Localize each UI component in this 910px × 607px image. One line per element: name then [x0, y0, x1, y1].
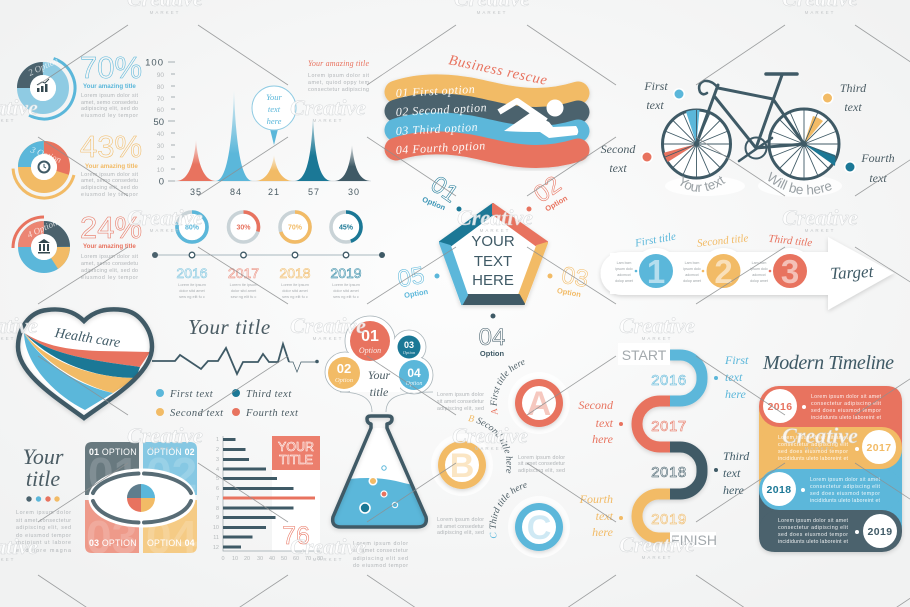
watermark: creative market stamps: MARKET: [480, 228, 510, 233]
panel: four option eye: 02: [146, 448, 197, 500]
chart: percent gauges and year timeline: 70%: [288, 224, 303, 232]
panel: health care heart: [18, 309, 152, 418]
panel: flask cloud: Option: [403, 350, 416, 355]
option numbers: 03: [559, 262, 590, 293]
text block: your title bottom left: [16, 444, 71, 554]
panel: pentagon options: TEXT: [474, 253, 512, 270]
text block: flask lorem: Lorem ipsum dolor: [353, 541, 408, 547]
watermark: creative market stamps: MARKET: [805, 10, 835, 15]
text block: flask lorem: adipiscing elit sed: [353, 556, 408, 562]
panel: modern timeline card: Lorem ipsum dolor sit amet: [810, 477, 881, 483]
line: heartbeat: [152, 344, 319, 374]
panel: donut 24%: eiusmod ley tempor: [81, 275, 138, 281]
panel: flask cloud: 02: [337, 361, 351, 376]
title box: TITLE: [279, 453, 313, 467]
watermark: creative market stamps: MARKET: [805, 228, 835, 233]
panel: modern timeline card: incididunts uleto laboreint et: [810, 498, 881, 504]
chart: percent gauges and year timeline: 80%: [185, 224, 200, 232]
panel: donut 24%: amet, semo consedetu: [81, 261, 138, 267]
bike labels: Fourth: [860, 151, 895, 165]
chart: spike area chart: 40: [157, 131, 164, 138]
panel: pentagon options: [396, 171, 590, 358]
chart: percent gauges and year timeline: 2017: [228, 265, 259, 281]
watermark: creative market stamps: Creative: [127, 205, 203, 230]
panel: donut 24%: 4 Option: [26, 217, 59, 240]
panel: B second title: sit amet consedetur: [518, 461, 565, 467]
panel: flask cloud: Option: [406, 381, 422, 387]
panel: target arrow: ipsum dolo: [615, 267, 633, 271]
chart: percent gauges and year timeline: [152, 212, 385, 299]
panel: modern timeline card: consectetur adipiscing elit: [811, 401, 882, 407]
panel: donut 70%: adipiscing elit, sed do: [81, 106, 138, 112]
panel: bicycle: [600, 72, 895, 195]
legend: heart: First text: [169, 389, 214, 400]
panel: snake timeline: text: [596, 509, 614, 523]
panel: C third title: C: [527, 509, 551, 547]
panel: bicycle: Your text: [680, 176, 726, 192]
chart: horizontal bars: 6: [216, 486, 219, 492]
rear wheel with spokes: [769, 109, 839, 179]
watermark: creative market stamps: Creative: [290, 95, 366, 120]
panel: C third title: adipiscing elit, sed: [437, 530, 484, 536]
panel: snake timeline: here: [723, 483, 745, 497]
chart: horizontal bars: 10: [232, 556, 238, 562]
watermark: creative market stamps: MARKET: [150, 228, 180, 233]
panel: donut 24%: adipiscing elit, sed do: [81, 268, 138, 274]
panel: target arrow: dolop amet: [683, 279, 701, 283]
callout: your text here: text: [268, 104, 281, 114]
option numbers: 04: [479, 324, 505, 351]
watermark: creative market stamps: Creative: [457, 205, 533, 230]
panel: donut 70%: Lorem ipsum dolor sit: [81, 93, 139, 99]
panel: modern timeline card: incididunts uleto laboreint et: [811, 415, 882, 421]
panel: four option eye: OPTION 02: [147, 447, 195, 457]
option numbers: Option: [556, 286, 582, 299]
panel: donut 70%: [5, 49, 142, 127]
panel: A first title: Lorem ipsum dolor: [437, 392, 484, 398]
panel: business rescue waves: 01 First option: [395, 82, 476, 100]
chart: percent gauges and year timeline: sew ng elit fu c: [231, 294, 256, 299]
panel: A first title: sit amet consedetur: [437, 399, 484, 405]
panel: C third title: Lorem ipsum dolor: [437, 517, 484, 523]
panel: target arrow: 1: [647, 253, 665, 290]
panel: target arrow: ipsum dolo: [750, 267, 768, 271]
panel: snake timeline: Fourth: [579, 492, 613, 506]
option numbers: 01: [426, 171, 463, 208]
panel: donut 43%: amet, semo consedetu: [81, 178, 138, 184]
chart: percent gauges and year timeline: Lorem ite ipsum: [230, 282, 257, 287]
panel: donut 43%: 3 Option: [28, 144, 63, 165]
panel: snake timeline: 2016: [651, 372, 687, 389]
year badges: 2017: [867, 442, 891, 454]
panel: C third title: [437, 483, 564, 553]
panel: flask cloud: title: [370, 385, 389, 399]
panel: donut 24%: Your amazing title: [83, 243, 136, 250]
panel: snake timeline: First: [724, 353, 749, 367]
text block: your title bottom left: do eiusmod tempor: [16, 533, 71, 539]
chart: spike area chart: 57: [308, 187, 320, 197]
chart: spike area chart: 100: [145, 58, 164, 68]
text block: your title bottom left: incipiunt ut labore: [16, 540, 71, 546]
option numbers: Option: [480, 349, 504, 358]
chart: spike area chart: 60: [157, 107, 164, 114]
bike labels: text: [844, 100, 862, 114]
text block: amazing title: [308, 59, 370, 93]
panel: flask cloud: 04: [407, 366, 421, 380]
panel: flask cloud: Option: [335, 377, 353, 384]
panel: bicycle: Will be here: [768, 172, 832, 195]
panel: donut 24%: 24%: [80, 210, 142, 245]
chart: percent gauges and year timeline: dolor sitd amet: [282, 288, 309, 293]
title box: YOUR: [278, 440, 314, 454]
panel: target arrow: 3: [781, 253, 799, 290]
chart: horizontal bars: 50: [281, 556, 287, 562]
panel: flask cloud: Your: [368, 368, 390, 382]
watermark: creative market stamps: Creative: [619, 532, 695, 557]
panel: donut 70%: Your amazing title: [83, 83, 136, 90]
chart: percent gauges and year timeline: dolor sitd amet: [231, 288, 257, 293]
text block: flask lorem: [353, 541, 408, 569]
panel: four option eye: 01 OPTION: [89, 447, 137, 457]
title: modern timeline: Modern Timeline: [762, 352, 894, 374]
text block: amazing title: Lorem ipsum dolor sit: [308, 73, 370, 79]
text block: your title bottom left: et dolore magna: [16, 548, 71, 554]
panel: donut 24%: Lorem ipsum dolor sit: [81, 254, 139, 260]
chart: horizontal bars: 9: [216, 515, 219, 521]
panel: snake timeline: 2017: [651, 418, 687, 435]
panel: snake timeline: 2018: [651, 464, 687, 481]
bike labels: Third: [840, 81, 867, 95]
panel: flask cloud: 03: [404, 340, 414, 350]
panel: modern timeline card: Lorem ipsum dolor sit amet: [811, 394, 882, 400]
panel: target arrow: adcmcct: [617, 273, 631, 277]
chart: horizontal bars: 80: [317, 556, 323, 562]
panel: snake timeline: text: [596, 416, 614, 430]
year badges: 2018: [767, 484, 791, 496]
panel: A first title: adipiscing elit, sed: [437, 406, 484, 412]
panel: target arrow: Third title: [768, 233, 813, 249]
panel: donut 43%: 43%: [80, 129, 142, 164]
legend: heart: Second text: [170, 408, 224, 419]
callout: your text here: here: [267, 116, 282, 126]
panel: modern timeline card: sed does eiusmod tempor: [811, 408, 881, 414]
chart: horizontal bars: 20: [244, 556, 250, 562]
chart: percent gauges and year timeline: Lorem ite ipsum: [332, 282, 360, 287]
legend: heart: Third text: [246, 389, 292, 400]
panel: snake timeline: here: [592, 525, 614, 539]
panel: target arrow: dolop amet: [615, 279, 633, 283]
panel: modern timeline card: sed does eiusmod tempor: [778, 449, 848, 455]
chart: spike area chart: 35: [190, 187, 202, 197]
panel: target arrow: Lam bcm: [617, 261, 631, 265]
panel: four option eye: 04: [146, 511, 198, 563]
chart: spike area chart: 30: [157, 143, 164, 150]
panel: target arrow: dolop amet: [750, 279, 768, 283]
bike labels: text: [609, 161, 627, 175]
panel: business rescue waves: 02 Second option: [395, 100, 487, 119]
panel: modern timeline card: incididunts uleto laboreint et: [778, 456, 849, 462]
panel: target arrow: adcmcct: [752, 273, 766, 277]
panel: target arrow: ipsum dolo: [683, 267, 701, 271]
panel: modern timeline card: incididunts uleto laboreint et: [778, 539, 849, 545]
panel: snake timeline: [578, 343, 750, 548]
panel: target arrow: [600, 231, 894, 310]
chart: spike area chart: 90: [157, 72, 164, 79]
watermark: creative market stamps: Creative: [452, 423, 528, 448]
panel: flask cloud: [325, 316, 433, 412]
watermark: creative market stamps: Creative: [290, 313, 366, 338]
panel: business rescue waves: [395, 52, 578, 157]
text block: amazing title: Your amazing title: [308, 59, 369, 68]
chart: horizontal bars: 40: [269, 556, 275, 562]
chart: percent gauges and year timeline: sew ng elit fu c: [333, 294, 359, 299]
panel: donut 43%: Lorem ipsum dolor sit: [81, 172, 139, 178]
watermark: creative market stamps: Creative: [127, 423, 203, 448]
option numbers: 05: [396, 262, 427, 293]
chart: spike area chart: [145, 58, 371, 197]
panel: B second title: B: [450, 447, 474, 485]
chart: percent gauges and year timeline: 2018: [279, 265, 311, 281]
chart: horizontal bars: 70: [305, 556, 311, 562]
panel: health care heart: Health care: [53, 326, 121, 351]
chart: percent gauges and year timeline: Lorem ite ipsum: [178, 282, 206, 287]
panel: donut 43%: Your amazing title: [85, 163, 138, 170]
panel: modern timeline card: Lorem ipsum dolor sit amet: [778, 435, 849, 441]
panel: snake timeline: here: [725, 387, 747, 401]
panel: snake timeline: Third: [723, 449, 750, 463]
panel: B second title: [437, 415, 565, 491]
callout: your text here: Your: [266, 92, 283, 102]
watermark: creative market stamps: MARKET: [642, 555, 672, 560]
panel: snake timeline: Second: [578, 398, 614, 412]
title: your title: Your title: [188, 315, 271, 339]
panel: four option eye: [85, 442, 198, 563]
panel: target arrow: Lam bcm: [685, 261, 699, 265]
panel: business rescue waves: Business rescue: [447, 52, 549, 89]
panel: snake timeline: FINISH: [671, 532, 717, 548]
panel: modern timeline card: Lorem ipsum dolor sit amet: [778, 518, 849, 524]
watermark: creative market stamps: MARKET: [642, 336, 672, 341]
icon: swimmer: [499, 100, 578, 138]
text block: flask lorem: do eiusmod tempor: [353, 563, 408, 569]
panel: flask cloud: 01: [361, 328, 379, 345]
panel: snake timeline: START: [622, 347, 667, 363]
watermark: creative market stamps: MARKET: [313, 557, 343, 562]
panel: A first title: A First title here: [490, 360, 525, 415]
chart: percent gauges and year timeline: sew ng elit fu c: [179, 294, 205, 299]
watermark: creative market stamps: Creative: [619, 313, 695, 338]
callout: your text here: [252, 86, 296, 145]
option numbers: Option: [544, 193, 569, 213]
chart: horizontal bars: 12: [213, 545, 219, 551]
watermark: creative market stamps: MARKET: [313, 118, 343, 123]
chart: spike area chart: 0: [159, 176, 164, 188]
panel: donut 70%: 2 Option: [27, 55, 60, 78]
chart: percent gauges and year timeline: 2016: [176, 265, 208, 281]
panel: donut 70%: amet, semo consedetu: [81, 100, 138, 106]
panel: B second title: adipiscing elit, sed: [518, 468, 565, 474]
panel: snake timeline: text: [723, 466, 741, 480]
chart: spike area chart: 10: [157, 167, 164, 174]
panel: donut 43%: adipiscing elit, sed do: [81, 185, 138, 191]
panel: four option eye: 01: [88, 448, 139, 500]
panel: modern timeline card: sed does eiusmod tempor: [810, 491, 880, 497]
chart: horizontal bars: 8: [216, 506, 219, 512]
panel: target arrow: Second title: [696, 232, 749, 250]
panel: donut 43%: [6, 129, 142, 205]
bike labels: text: [869, 171, 887, 185]
chart: percent gauges and year timeline: dolor sitd amet: [179, 288, 206, 293]
text block: your title bottom left: adipiscing elit, sed: [16, 525, 71, 531]
option numbers: Option: [421, 195, 447, 212]
chart: horizontal bars: 30: [257, 556, 263, 562]
bike labels: text: [646, 98, 664, 112]
watermark: creative market stamps: MARKET: [805, 446, 835, 451]
year badges: 2019: [868, 526, 892, 538]
chart: horizontal bars: 0: [221, 556, 225, 562]
panel: four option eye: 03 OPTION: [89, 538, 137, 548]
text block: your title bottom left: Your: [23, 444, 64, 469]
chart: spike area chart: 50: [153, 117, 164, 128]
panel: A first title: A: [527, 385, 551, 423]
text block: amazing title: amet, quiod oppy tem: [308, 80, 370, 86]
chart: horizontal bars: 1: [216, 437, 219, 443]
chart: spike area chart: 30: [348, 187, 360, 197]
chart: horizontal bars: 5: [216, 476, 219, 482]
panel: four option eye: 03: [86, 511, 137, 563]
watermark: creative market stamps: Creative: [290, 534, 366, 559]
chart: horizontal bars: 3: [216, 457, 219, 463]
icon: flask: [330, 416, 430, 530]
chart: horizontal bars: 7: [216, 496, 219, 502]
chart: spike area chart: 84: [230, 187, 242, 197]
watermark: creative market stamps: Creative: [782, 423, 858, 448]
panel: B second title: Lorem ipsum dolor: [518, 455, 565, 461]
panel: modern timeline card: sed does eiusmod tempor: [778, 532, 848, 538]
panel: pentagon options: YOUR: [471, 233, 515, 250]
panel: C third title: sit amet consedetur: [437, 524, 484, 530]
legend: heart: Fourth text: [245, 408, 299, 419]
chart: spike area chart: 70: [157, 96, 164, 103]
panel: snake timeline: here: [592, 432, 614, 446]
chart: spike area chart: 20: [157, 155, 164, 162]
panel: A first title: [437, 360, 564, 430]
text block: your title bottom left: Lorem ipsum dolor: [16, 510, 71, 516]
watermark: creative market stamps: MARKET: [150, 10, 180, 15]
chart: horizontal bars: 76: [282, 522, 310, 550]
panel: donut 70%: 70%: [80, 50, 142, 85]
front wheel with spokes: [662, 110, 730, 178]
bike labels: [601, 79, 895, 185]
chart: horizontal bars: 11: [213, 535, 219, 541]
panel: C third title: C Third title here: [490, 483, 527, 538]
panel: snake timeline: 2019: [651, 511, 687, 528]
title box: [272, 436, 320, 470]
watermark: creative market stamps: MARKET: [477, 10, 507, 15]
panel: target arrow: Lam bcm: [752, 261, 766, 265]
panel: modern timeline card: consectetur adipiscing elit: [778, 442, 849, 448]
chart: percent gauges and year timeline: dolor sitd amet: [333, 288, 360, 293]
panel: donut 24%: [13, 210, 142, 281]
text block: flask lorem: sit amet consectetur: [353, 548, 408, 554]
panel: modern timeline card: consectetur adipiscing elit: [810, 484, 881, 490]
bike labels: Second: [601, 142, 636, 156]
panel: donut 70%: eiusmod ley tempor: [81, 113, 138, 119]
chart: horizontal bars: 10: [213, 525, 219, 531]
option numbers: 02: [529, 171, 566, 208]
panel: business rescue waves: 04 Fourth option: [395, 138, 486, 157]
panel: flask cloud: Option: [359, 346, 381, 355]
bike frame: [696, 74, 804, 161]
panel: modern timeline card: [759, 386, 902, 552]
chart: spike area chart: 80: [157, 84, 164, 91]
panel: target arrow: Target: [830, 262, 875, 283]
year badges: 2016: [768, 401, 792, 413]
chart: percent gauges and year timeline: 45%: [339, 224, 354, 232]
chart: horizontal bars: 4: [216, 467, 219, 473]
panel: donut 43%: eiusmod ley tempor: [81, 192, 138, 198]
watermark: creative market stamps: MARKET: [313, 336, 343, 341]
text block: your title bottom left: sit amet consectetur: [16, 518, 71, 524]
chart: horizontal bars: 60: [293, 556, 299, 562]
watermark: creative market stamps: Creative: [782, 205, 858, 230]
legend: heart: [156, 389, 299, 419]
chart: percent gauges and year timeline: sew ng elit fu c: [282, 294, 308, 299]
bike labels: First: [643, 79, 668, 93]
chart: spike area chart: 21: [268, 187, 280, 197]
panel: B second title: B Second title here: [468, 415, 513, 474]
chart: horizontal bars: 2: [216, 447, 219, 453]
chart: percent gauges and year timeline: 30%: [236, 224, 251, 232]
option numbers: Option: [403, 287, 429, 300]
panel: target arrow: adcmcct: [685, 273, 699, 277]
year badges: [762, 389, 897, 548]
chart: percent gauges and year timeline: 2019: [330, 265, 362, 281]
option numbers: [396, 171, 590, 358]
text block: amazing title: consectetur adipiscing: [308, 87, 369, 93]
panel: snake timeline: text: [725, 370, 743, 384]
watermark: creative market stamps: MARKET: [150, 446, 180, 451]
panel: target arrow: 2: [714, 253, 733, 290]
chart: percent gauges and year timeline: Lorem ite ipsum: [281, 282, 309, 287]
panel: four option eye: OPTION 04: [147, 538, 195, 548]
chart: horizontal bars: [213, 436, 323, 562]
panel: modern timeline card: consectetur adipiscing elit: [778, 525, 849, 531]
text block: your title bottom left: title: [26, 466, 60, 491]
panel: target arrow: First title: [633, 231, 677, 250]
panel: business rescue waves: 03 Third option: [395, 120, 478, 138]
panel: pentagon options: HERE: [472, 272, 514, 289]
watermark: creative market stamps: MARKET: [475, 446, 505, 451]
